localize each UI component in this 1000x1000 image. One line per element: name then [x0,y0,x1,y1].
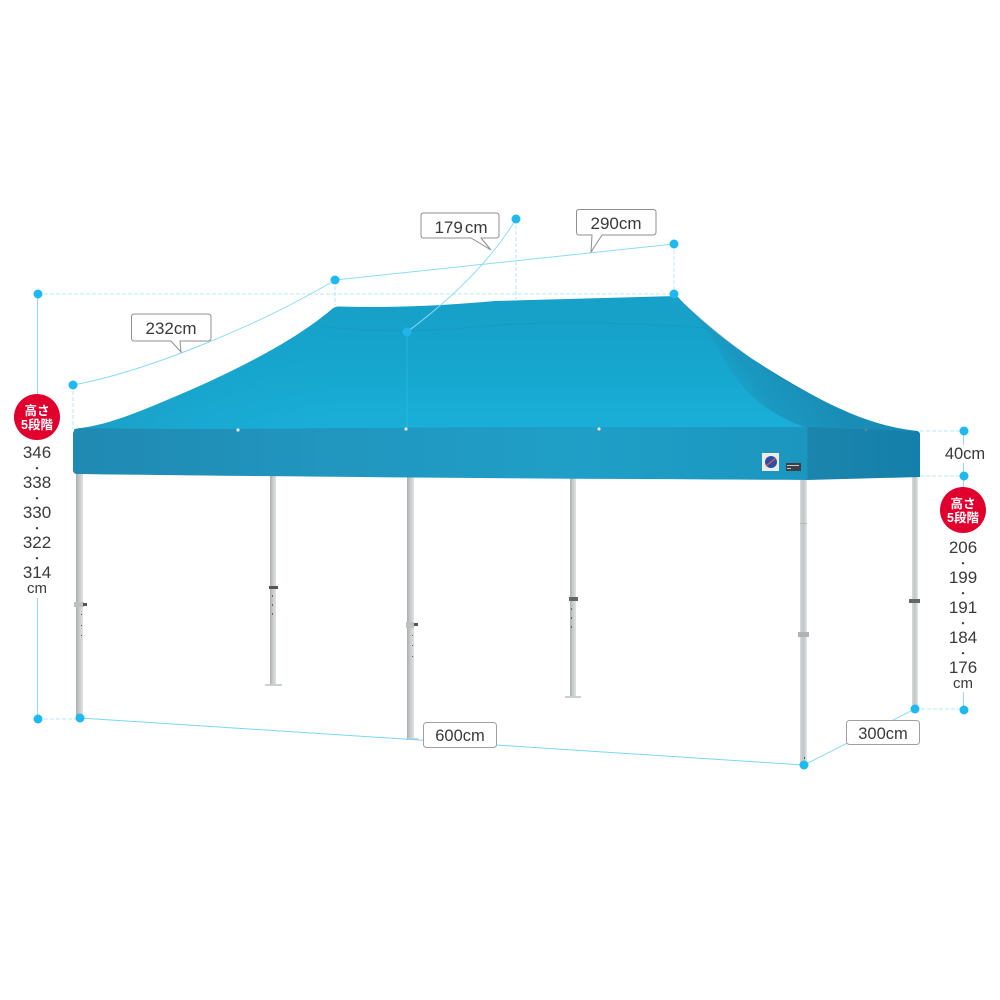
text: left heights: 330 [23,503,51,522]
dimension dots [34,214,968,770]
pole: back right [909,477,920,709]
canopy right slope [677,297,918,431]
badge: left height 5 levels [14,394,60,440]
text: right heights: ・ [958,618,968,630]
text: right heights: 206 [949,538,977,557]
text: right heights: ・ [958,558,968,570]
dimension: 600cm line [80,718,804,765]
text: right heights: 191 [949,598,977,617]
text: right heights: 176 [949,658,977,677]
text: left heights: 314 [23,563,51,582]
callout: 179cm [421,213,499,250]
callout: 600cm: 600cm [435,727,485,745]
callout: 600cm [424,722,496,748]
text: left heights: 338 [23,473,51,492]
text: left heights [23,443,51,597]
pole: front left [74,474,87,718]
pole: back middle [565,477,581,698]
callout: 232cm [132,314,211,352]
callout: 290cm: 290cm [590,214,642,233]
icon: flame retardant label [762,453,779,471]
grommets [236,427,867,432]
text: right heights [949,538,977,692]
dimension: 300cm line [804,709,915,765]
text: left heights: cm [27,580,47,597]
badge: left height 5 levels: 高さ [24,403,50,418]
callout: 179cm: 179cm [434,218,488,237]
badge: left height 5 levels: 5段階 [21,418,53,432]
text: left heights: ・ [32,463,42,475]
dimension: right height line [962,431,964,710]
canopy valance [73,427,920,480]
callout: 300cm: 300cm [858,725,908,743]
callout: 232cm: 232cm [145,319,197,338]
text: right heights: 184 [949,628,977,647]
text: right heights: ・ [958,648,968,660]
pole: back left [265,475,282,686]
badge: right height 5 levels: 高さ [950,496,976,511]
pole: front right [798,480,809,764]
canopy seam [320,323,707,331]
canopy [73,296,920,480]
dimension: left total height line [36,294,38,719]
dimension: 290cm line [335,244,674,280]
dimension: 179cm curve [407,219,516,332]
callout: 300cm [846,720,920,744]
badge: right height 5 levels [940,487,986,533]
dashed guides [38,219,964,719]
guide: centre drop on canopy [406,332,408,428]
label: 40cm: 40cm [945,445,985,463]
canopy roof [74,296,918,436]
text: left heights: 322 [23,533,51,552]
text: right heights: 199 [949,568,977,587]
text: left heights: ・ [32,523,42,535]
text: left heights: ・ [32,493,42,505]
text: right heights: cm [953,675,973,692]
pole: front middle [406,476,418,740]
icon: black tag [786,463,801,471]
callout: 290cm [576,210,656,252]
badge: right height 5 levels: 5段階 [947,511,979,525]
text: left heights: 346 [23,443,51,462]
dimension: 232cm curve [73,280,335,385]
text: right heights: ・ [958,588,968,600]
poles [74,474,920,764]
text: left heights: ・ [32,553,42,565]
